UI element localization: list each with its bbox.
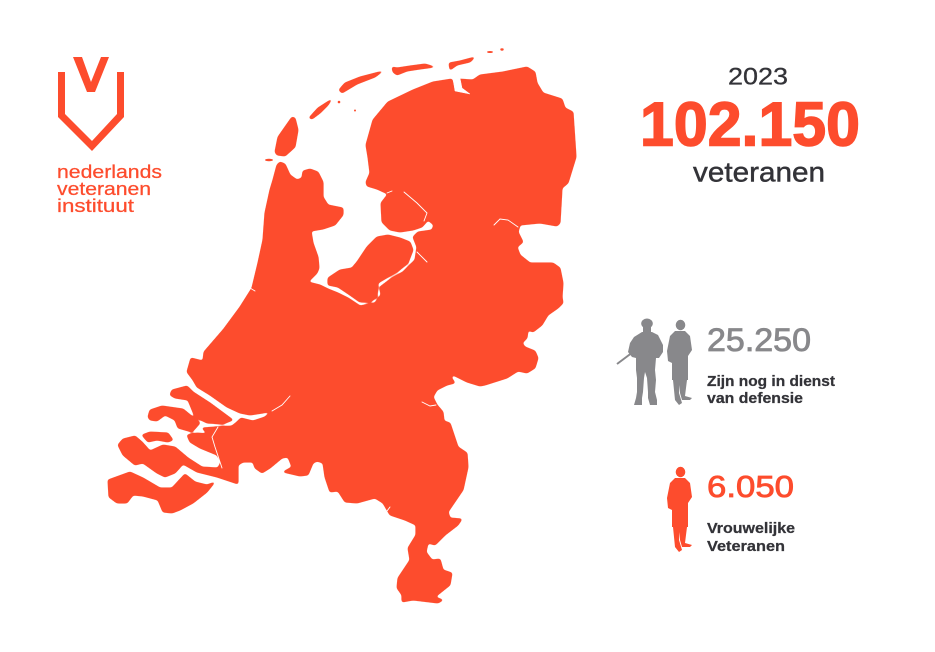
caption: female veterans — [707, 521, 795, 555]
logo wordmark — [57, 162, 162, 216]
small islets — [265, 48, 504, 161]
caption: in service: Zijn nog in dienst — [707, 374, 835, 390]
map of the Netherlands — [108, 48, 576, 603]
Terschelling — [339, 71, 383, 93]
logo: Nederlands Veteranen Instituut — [57, 57, 162, 216]
number: 6.050: 6.050 — [707, 469, 794, 504]
Ameland — [392, 64, 435, 75]
Texel — [275, 117, 298, 156]
Flevoland — [328, 235, 413, 302]
icon: woman silhouette — [667, 467, 692, 552]
icon: soldier and woman silhouettes — [617, 318, 692, 405]
Noord-Beveland — [142, 432, 173, 442]
Schouwen-Duiveland — [148, 406, 200, 432]
year: 2023 — [728, 64, 788, 90]
caption: in service: van defensie — [707, 391, 803, 407]
total number of veterans: 102.150 — [640, 90, 860, 160]
caption: female veterans: Veteranen — [707, 539, 785, 555]
Zeeuws-Vlaanderen — [108, 472, 215, 513]
land masses — [108, 57, 576, 603]
statistic: still in service — [617, 318, 835, 407]
Schiermonnikoog — [449, 57, 475, 70]
veteranen label: veteranen — [693, 156, 825, 188]
icon: V shield — [58, 57, 124, 151]
caption: in service — [707, 374, 835, 407]
Goeree-Overflakkee — [170, 386, 233, 424]
Vlieland — [309, 99, 332, 119]
caption: female veterans: Vrouwelijke — [707, 521, 795, 537]
number: 25.250: 25.250 — [707, 322, 811, 358]
logo wordmark: instituut — [57, 196, 134, 216]
waterways — [212, 78, 518, 511]
logo wordmark: nederlands — [57, 162, 162, 182]
statistic: female veterans — [667, 467, 795, 555]
mainland — [118, 67, 576, 603]
headline statistic — [640, 64, 860, 188]
logo wordmark: veteranen — [57, 179, 151, 199]
